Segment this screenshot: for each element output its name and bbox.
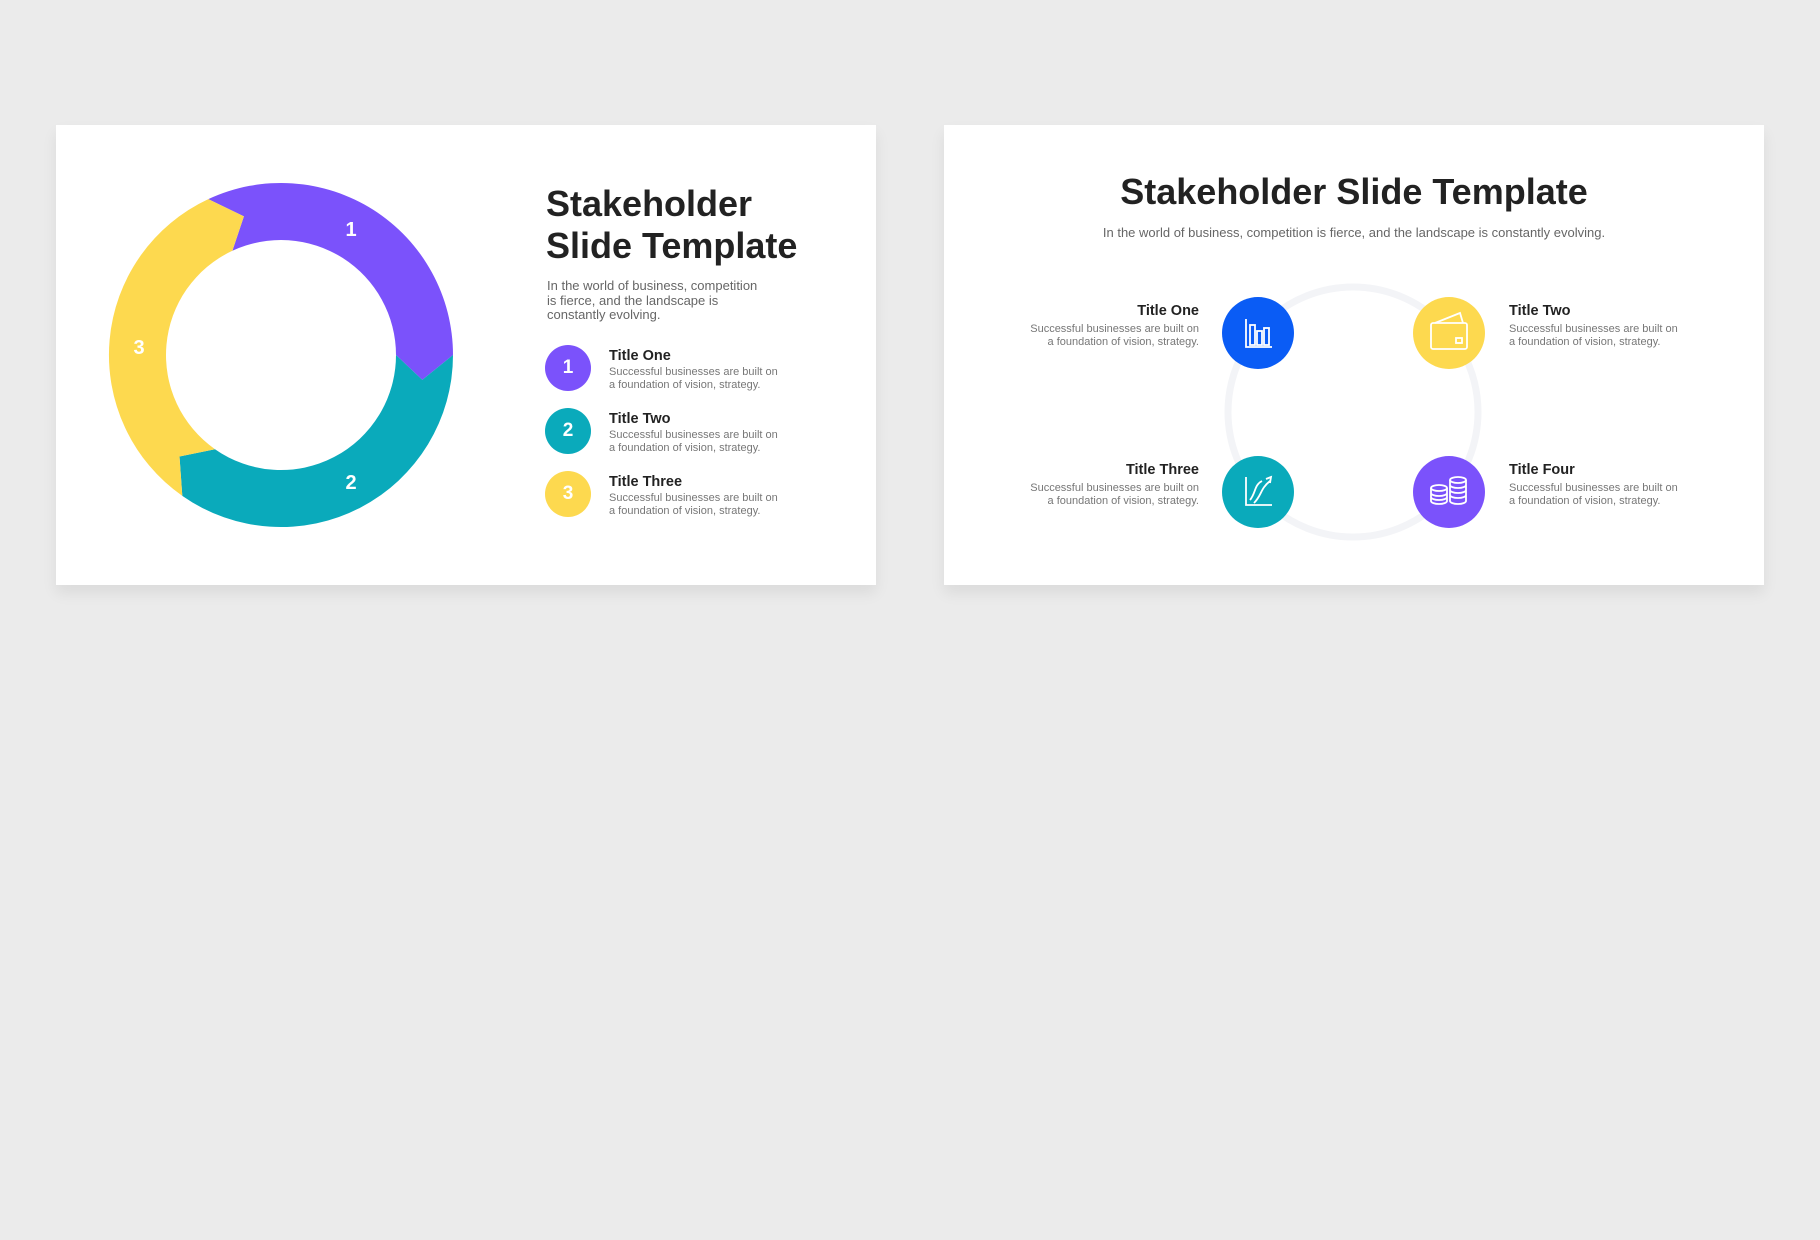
item: Title Two: Successful businesses are built on — [1509, 323, 1678, 335]
list item 1: Title One — [609, 348, 671, 364]
title: Slide Template — [546, 225, 797, 266]
item: Title One: Title One — [1137, 303, 1199, 319]
intro text: constantly evolving. — [547, 307, 660, 322]
item: Title Four: Title Four — [1509, 462, 1575, 478]
item: Title Four — [1509, 462, 1678, 506]
item: Title Four: Successful businesses are built on — [1509, 482, 1678, 494]
item: Title Three — [1030, 462, 1199, 506]
list item 3 — [545, 471, 778, 517]
item: Title Three: Successful businesses are built on — [1030, 482, 1199, 494]
intro text: is fierce, and the landscape is — [547, 292, 718, 308]
title — [546, 183, 797, 266]
item: Title One: Successful businesses are built on — [1030, 323, 1199, 335]
panel: right slide — [944, 125, 1764, 585]
panel: left slide — [56, 125, 876, 585]
list item 2: a foundation of vision, strategy. — [609, 442, 760, 454]
title: Stakeholder — [546, 183, 752, 224]
list item 3: Title Three — [609, 474, 682, 490]
item: Title Four: a foundation of vision, strategy. — [1509, 494, 1660, 506]
segment 3 yellow: 3 — [133, 337, 145, 359]
segment 3 yellow — [109, 199, 244, 496]
item: Title One — [1030, 303, 1199, 348]
list item 1: a foundation of vision, strategy. — [609, 378, 760, 390]
item: Title Three: a foundation of vision, strategy. — [1048, 494, 1199, 506]
icon: bar chart — [1222, 297, 1294, 369]
intro text — [547, 278, 757, 322]
ring and icons — [1222, 284, 1485, 540]
list item 1 — [545, 345, 778, 391]
list item 3: 3 — [563, 483, 573, 504]
item: Title Three: Title Three — [1126, 462, 1199, 478]
segment 1 purple: 1 — [345, 219, 357, 241]
icon: wallet — [1413, 297, 1485, 369]
list item 2: 2 — [563, 420, 573, 441]
segment 1 purple — [208, 183, 453, 380]
list item 2 — [545, 408, 778, 454]
donut chart — [108, 183, 453, 527]
list item 2: Successful businesses are built on — [609, 429, 778, 441]
subtitle: In the world of business, competition is fierce, and the landscape is constantly evolving. — [1103, 225, 1605, 240]
intro text: In the world of business, competition — [547, 278, 757, 293]
item: Title One: a foundation of vision, strategy. — [1048, 336, 1199, 348]
list item 2: Title Two — [609, 411, 670, 427]
list item 1: 1 — [563, 357, 573, 378]
segment 2 teal — [180, 355, 453, 527]
list item 3: Successful businesses are built on — [609, 492, 778, 504]
title: Stakeholder Slide Template — [1120, 171, 1588, 212]
item: Title Two — [1509, 303, 1678, 348]
item: Title Two: Title Two — [1509, 303, 1570, 319]
list item 3: a foundation of vision, strategy. — [609, 504, 760, 516]
item: Title Two: a foundation of vision, strategy. — [1509, 336, 1660, 348]
icon: coins — [1413, 456, 1485, 528]
segment 2 teal: 2 — [345, 472, 357, 494]
icon: growth chart — [1222, 456, 1294, 528]
list item 1: Successful businesses are built on — [609, 366, 778, 378]
